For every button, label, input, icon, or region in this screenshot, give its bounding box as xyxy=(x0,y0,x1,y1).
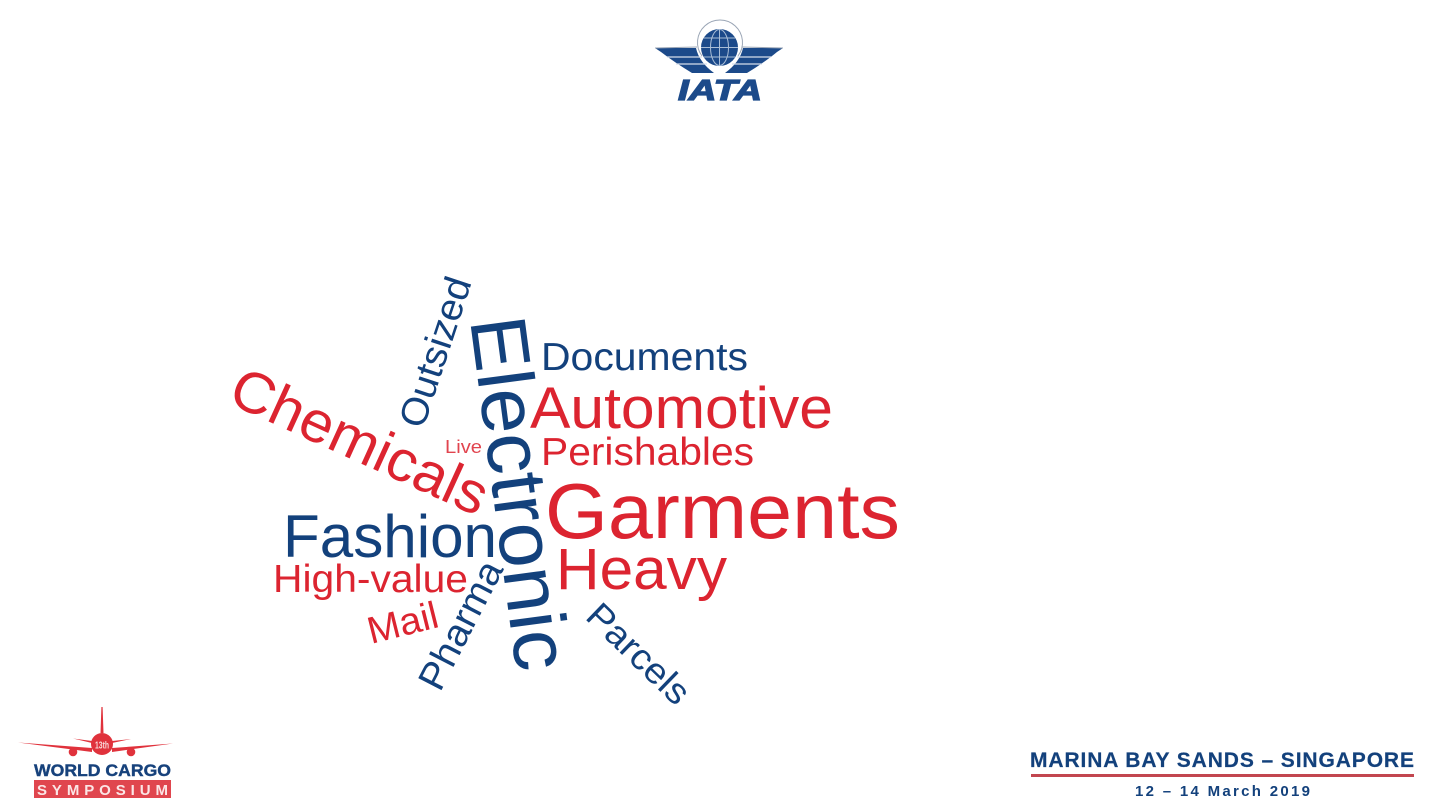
logo text: World Cargo: WORLD CARGO xyxy=(34,761,171,780)
venue: MARINA BAY SANDS – SINGAPORE xyxy=(1030,749,1414,772)
IATA logo xyxy=(655,20,783,107)
word: Live: Live xyxy=(445,437,482,457)
word: Pharma: Pharma xyxy=(411,553,512,697)
IATA wordmark: IATA xyxy=(678,75,762,107)
word: Automotive: Automotive xyxy=(530,376,833,441)
word: Documents: Documents xyxy=(541,336,748,379)
date: 12 – 14 March 2019 xyxy=(1135,783,1310,800)
word: Heavy: Heavy xyxy=(556,537,727,602)
word: Outsized: Outsized xyxy=(391,272,480,433)
word: High-value: High-value xyxy=(273,558,468,601)
word: Mail: Mail xyxy=(363,594,443,653)
word: Parcels: Parcels xyxy=(579,594,699,713)
word: Chemicals: Chemicals xyxy=(221,355,499,528)
icon: airplane xyxy=(18,707,173,756)
word: Perishables: Perishables xyxy=(541,431,754,474)
icon: airplane: 13th xyxy=(95,740,109,752)
word: Garments: Garments xyxy=(545,467,900,555)
word: Electronic: Electronic xyxy=(453,311,587,675)
icon: right wing xyxy=(725,47,783,73)
icon: globe xyxy=(701,29,738,66)
logo banner: Symposium: SYMPOSIUM xyxy=(37,782,168,799)
icon: left wing xyxy=(655,47,714,73)
icon: globe ring xyxy=(697,20,742,56)
venue and date xyxy=(1030,749,1414,800)
World Cargo Symposium logo xyxy=(18,707,173,799)
word: Fashion: Fashion xyxy=(283,503,497,570)
word cloud xyxy=(221,272,900,713)
